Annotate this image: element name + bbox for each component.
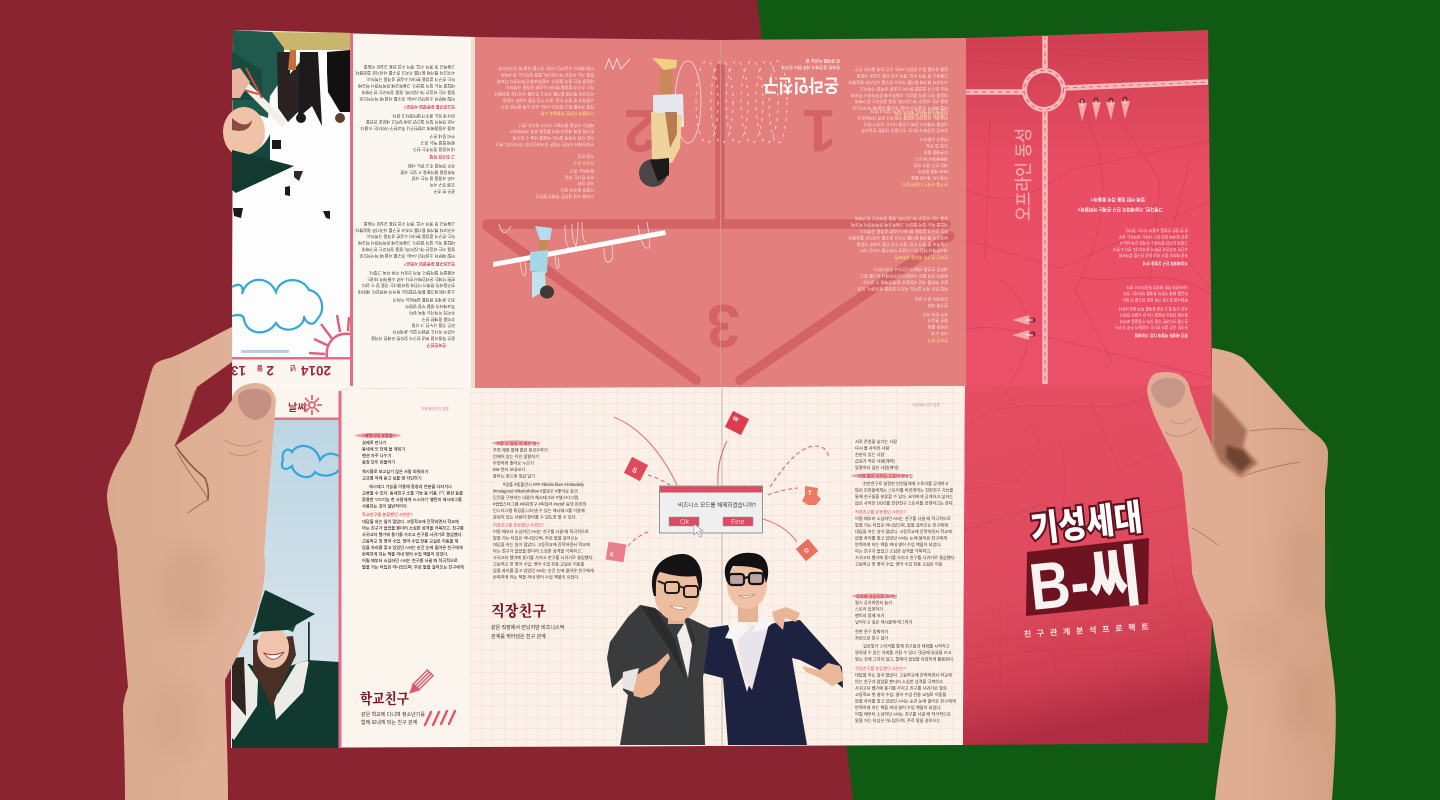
text column: upside-down upper: 서로 사정을 잘 아는 사람 xyxy=(412,175,455,182)
text column: upside-down upper: 요즘 사람들에게 고향친구나 학교친구 이야기는 드물다. xyxy=(359,125,455,132)
panel: front cover xyxy=(963,385,1212,745)
panel: top-right red map with roundabout xyxy=(966,30,1212,386)
text block: work friend lower right xyxy=(852,593,956,724)
text block: right column lower: 같은 관심사 xyxy=(927,317,948,324)
text block: right column lower: 직접 만난 적이 없어도 서로의 일상을 공유한다. 또한 xyxy=(858,285,948,292)
header: weather label and sun: 날씨 xyxy=(288,401,306,414)
text block: work friend left: 직장친구를 분류했던 사연은? xyxy=(493,522,545,528)
text block: work friend left: 앉을 자리를 찾고 있었던 A씨는 순간 눈에 들어온 친구에게 xyxy=(493,567,594,574)
heading subtitle: 된 관계를 이르는 말 xyxy=(806,58,840,65)
question heading xyxy=(1078,196,1163,213)
text block: work friend left: 관심이 있는 사람이 찾아올 수 있도록 할 수 있다. xyxy=(493,514,577,520)
dialog box: 비즈니스 모드를 해제하겠습니까? xyxy=(678,501,756,509)
text column: upside-down lower: 말을 거는 타입은 아니었으며, 말을 걸어오는 친구에게 xyxy=(362,246,455,253)
text block: work friend lower right: 일로맛가 스티커를 통해 친구들과 대화를 시작하고 xyxy=(863,642,950,650)
text block: left column: 디지털의 다양한 유형들과 소통 xyxy=(540,110,594,117)
text column: upside-down lower: 사람들이 많아졌다. 특히 코로나 이후 더욱 그렇다. xyxy=(369,269,455,276)
doodle: white ellipse and dashes xyxy=(605,59,787,143)
text block: right column lower: 장점이 있어 많은 사람들이 온라인에서 친구를 찾고 xyxy=(860,273,948,280)
text block: work friend lower right: 사귀고자 했기에 용기를 가지고 친구를 사귀기로 결심 xyxy=(855,684,947,692)
text block: offline paragraph 2: 온라인 공간 없이 만나는 사람들이 주로 친구가 xyxy=(1115,325,1188,330)
icon: blue cloud outline xyxy=(232,280,322,332)
text block: work friend left xyxy=(492,440,594,580)
text column: upside-down upper: 대답을 하는 일이 많았다. 고등학교에 진학하면서 학교에 xyxy=(358,82,455,89)
text block: work friend left: 인스타그램 특징을 나타낼 수 있는 해시태그를 이용해 xyxy=(493,507,585,514)
text block: offline paragraph 2: 1990년대 학번 세대의 특징이라고 한다 xyxy=(1126,285,1188,290)
text column: upside-down lower: 시간이 지나도 변함이 없는 관계이다 xyxy=(392,329,455,336)
icon: O file xyxy=(796,539,818,561)
panel: bottom-center grid spread xyxy=(470,386,965,747)
text block: work friend lower right: 앉을 자리를 찾고 있었던 A씨는 순간 눈에 들어온 친구에게 xyxy=(855,698,956,704)
text block: right column middle: 온라인 공간에서 만나는 친구들은 다양한 관심사로 xyxy=(861,127,948,134)
text block: offline paragraph 2: 모임을 통해 꾸준히 관계를 이어가는 것이 xyxy=(1123,291,1188,296)
text block: work friend left: 대답을 하는 일이 많았다. 고등학교에 진학하면서 학교에 xyxy=(493,541,590,548)
icon: Word file xyxy=(725,411,749,435)
text block: work friend left: 단전을 구현하는 내용의 해시태그와 '#셀스타그램, xyxy=(493,494,579,501)
text block: offline paragraph 2 xyxy=(1115,285,1188,338)
number 2: 2 xyxy=(624,97,657,164)
text block: work friend right: 말을 거는 타입은 아니었으며, 말을 걸어오는 친구에게 xyxy=(855,522,948,528)
subtitle: work friend: 관계를 뛰어넘은 친구 관계 xyxy=(491,633,546,640)
hand: right hand with thumb in front of brochure xyxy=(1147,348,1336,800)
text block: work friend right: 앉을 자리를 찾고 있었던 A씨는 눈에 들어온 친구에게 xyxy=(855,534,947,542)
bar with doodle loops xyxy=(499,222,650,276)
photo: upside-down graduates xyxy=(223,30,350,358)
decorative big lines xyxy=(487,68,950,380)
text column: upside-down lower: 사귀고자 했기에 용기를 가지고 친구를 사귀기로 결심했다. xyxy=(354,227,455,234)
road: cross with roundabout xyxy=(966,36,1208,384)
header: weather label and sun xyxy=(232,389,339,418)
text block: left column: 자주 만나는 모임 xyxy=(565,174,594,181)
text block: right column middle: 서로를 이해하고 함께 시간을 나누는 사이가 된다 xyxy=(864,121,948,128)
text block: right column lower: 자주 연락 하기 xyxy=(922,311,948,318)
text block: right column upper: 앉을 자리를 찾고 있었던 A씨는 순간 눈에 들어온 친구 xyxy=(855,66,948,73)
text block: work friend right xyxy=(851,438,956,568)
text block: left column: 디지털 시대 새로운 관계가 열린다 xyxy=(535,193,594,200)
icon: X file: X xyxy=(609,552,614,559)
text column: upside-down upper: 오랜 친구 사이 xyxy=(429,182,455,189)
text block: work friend right: 맞팔하지 않은 사람(계약) xyxy=(855,464,899,471)
text column: school friend: 책시를로 보고싶기 않은 사람 외워하기 xyxy=(362,468,428,475)
text block: right column lower: 온라인 친구의 특징을 살펴보면 xyxy=(894,254,948,261)
text column: upside-down upper: 아는 친구가 없었을 뿐더러 소심한 성격을 극복하고, xyxy=(366,76,455,83)
photo: graduate in sky xyxy=(232,419,339,748)
text block: right column lower: 모임에서 친구 만남 xyxy=(915,295,948,302)
text block: work friend lower right: 넣어두고 싶은 게시물에 태그하기 xyxy=(855,618,913,626)
title: B-ssi: B-씨 xyxy=(1026,539,1144,624)
date header: 2014 xyxy=(300,363,331,378)
text block: work friend right: 서로 존칭을 낮기는 사람 xyxy=(855,438,897,445)
text block: work friend right: 가장 많이 쓰이는 스토리 공유법 xyxy=(858,472,913,480)
curved connector lines xyxy=(614,417,829,546)
text column: school friend: 활용한 'OO기능 한 사람에게 스스하기' 챌린지 해시태그를 xyxy=(362,496,462,503)
icon: text file: T xyxy=(808,491,812,497)
text block: right column middle: 처음에는 낯설지만 대화를 이어가다 보면 가까워지고 xyxy=(857,114,948,121)
gap between fingers xyxy=(175,362,232,446)
question heading: 그렇다면, 기성세대의 친구 관계는 어떠할까? xyxy=(1078,206,1163,213)
text column: upside-down lower: 대답을 하는 일이 많았다. 고등학교에 진학하면서 학교에 xyxy=(358,240,455,247)
text block: offline paragraph 2: 서로 오래 알고 지낸 관계를 특히 중요시한다 xyxy=(1118,306,1188,311)
text block: left column: 어릴 때부터 소심하던 A씨는 친구를 사귈 때 적극적으로 xyxy=(498,65,594,72)
text column: school friend: 아는 친구가 없었을 뿐더러 소심한 성격을 극복하고, 친구를 xyxy=(362,524,464,532)
text column: upside-down lower: 같은 학창시절 보낸 친구가 있다면 오래된 기억들 xyxy=(371,335,455,342)
text block: work friend right: 급료가 적은 사람(계약) xyxy=(855,458,895,464)
text column: upside-down upper: 사귀고자 했기에 용기를 가지고 친구를 사귀기로 결심했다. xyxy=(354,70,455,77)
text block: right column middle xyxy=(857,108,948,188)
text column: school friend: 사용하는 것이 일반적이다. xyxy=(362,502,408,510)
heading: school friend: 학교친구 xyxy=(360,688,409,709)
text block: work friend left: 추천 계정 팔때 올린 원것우하기 xyxy=(493,446,548,454)
text column: school friend: 앉을 자리를 찾고 있었던 A씨는 순간 눈에 들어온 친구에게 xyxy=(362,544,463,551)
text block: right column lower: 고등학교 첫 영어 수업, 영어 수업 전용 교실로 이동을 xyxy=(856,241,948,248)
text block: work friend left: #instagood #likeforfollow #팔로우 #좋아요 등의 xyxy=(493,488,578,494)
panel: bottom-left sky photo and text column: 기성세대 친구 분류 xyxy=(421,406,449,411)
icon: Word file: W xyxy=(731,416,739,424)
text column: upside-down lower: 추억을 함께한 친구 xyxy=(422,316,455,323)
text block: right column upper: 디지털의 다양한 유형들과 소통 xyxy=(894,111,948,118)
number 1: 1 xyxy=(803,97,836,164)
text block: left column: 함께하는 친구 xyxy=(570,167,594,174)
text block: left column: 온라인에서 시작된 우정은 오프라인으로 이어지기도 한다 xyxy=(496,141,594,148)
text block: right column lower: 게시판에서 처음 만나 다양한 이야기를 나누던 사이 xyxy=(860,247,948,254)
text block: work friend left: 사귀고자 했기에 용기를 가지고 친구를 사귀기로 결심했다. xyxy=(493,554,594,561)
text block: work friend right: 어릴 때부터 소심하던 A씨는 친구를 사귈 때 적극적으로 xyxy=(855,515,951,522)
icon: slide file xyxy=(624,457,648,481)
text block: right column upper: 아는 친구가 없었을 뿐더러 소심한 성격을 극복하고, xyxy=(859,85,948,92)
text block: offline paragraph 2: 친구를 만나려면 직접 찾아가 얼굴을 보아야 xyxy=(1119,319,1188,324)
text block: work friend lower right: 대답을 하는 일이 많았다. 고등학교에 진학하면서 학교에 xyxy=(855,672,952,678)
title box xyxy=(1026,538,1149,616)
text block: work friend lower right: 어릴 때부터 소심하던 A씨는 친구를 사귈 때 적극적으로 xyxy=(855,710,951,718)
text block: right column middle: 게임 친구 맺기 사연 xyxy=(914,162,948,169)
text block: right column lower: 새로운 인연을 만들어 나간다고 이야기한다 xyxy=(874,266,948,273)
text block: work friend right: 직장친구를 분류했던 사연은? xyxy=(855,508,907,516)
text block: work friend right: 많은 인친들에게는 스토리를 비공개하는 친한친구 기능을 xyxy=(855,486,953,494)
icon: text file xyxy=(802,486,821,505)
text block: left column: 서로 다른 지역에 살아도 마음을 나눌 수 있으며, xyxy=(511,135,594,142)
heading subtitle xyxy=(781,58,840,71)
map roads xyxy=(966,55,1212,384)
subtitle: friend relationship analysis project: 친구관계분석프로젝트 xyxy=(1024,621,1150,639)
text block: work friend lower right: 아는 친구가 없었을 뿐더러 소심한 성격을 극복하고 xyxy=(855,678,943,685)
text column: upside-down lower: 친구들과의 관계가 이전과 달라졌다는 것을 알 수 있다. xyxy=(361,282,455,289)
text block: work friend right: 친분이 있는 사람 xyxy=(855,451,884,458)
text block: work friend lower right: 말을 거는 타입은 아니었으며, 주로 말을 걸어오는 xyxy=(855,717,940,724)
date header: 13 xyxy=(230,363,246,378)
date header xyxy=(230,363,331,378)
text block: work friend right: 아는 친구가 없었고 소심한 성격을 극복하고, xyxy=(855,548,931,554)
text block: work friend lower right: 자만으로 친구 끊기 xyxy=(855,634,888,642)
text block: right column lower: 온라인 친구 xyxy=(927,337,948,344)
photo: upside-down boy in checked shirt xyxy=(639,58,684,187)
text block: work friend left: #맞폴 #맞폴언시 ### #likeforlikes #instadaily xyxy=(503,481,585,488)
text column: school friend: 해시태그 기능을 이용해 동창과 친분을 다지거나 xyxy=(369,483,452,490)
text column: school friend: 동네에 또 언제 들 계획기 xyxy=(362,446,405,452)
text block: right column upper: 고등학교 첫 영어 수업, 영어 수업 전용 교실로 이동을 xyxy=(856,73,948,80)
text block: offline paragraph 1: 같은 동네에 살던 친구 사이는 깊어지는 경우 xyxy=(1118,234,1188,239)
text block: left column: 때로는 고민을 털어놓는 사이가 되기도 한다 xyxy=(519,122,594,129)
text block: work friend right: 대답을 하는 일이 많았다. 고등학교에 진학하면서 학교에 xyxy=(855,528,952,535)
text block: right column lower xyxy=(847,215,948,344)
subtitle: school friend: 같은 학교에 다니며 청소년기를 xyxy=(361,711,425,718)
icon: blue cloud xyxy=(282,446,339,477)
pink rules xyxy=(232,33,475,388)
text block: work friend lower right: 멘트의 함께 하기 xyxy=(855,612,884,619)
text block: work friend right: 사귀고자 했기에 용기를 가지고 친구를 사귀기로 결심했다. xyxy=(855,554,956,561)
text block: right column lower: 대답을 하는 일이 많았다. 고등학교에 진학하면서 학교에 xyxy=(851,222,948,229)
soft shading on hand xyxy=(1228,520,1318,740)
dialog box: Ok xyxy=(680,519,689,526)
icon: pencil xyxy=(408,670,433,695)
text block: offline paragraph 2: 학창시절 친구와 가족 같은 친구를 더 찾는 xyxy=(1122,297,1188,302)
text block: right column middle: 커뮤니티 게시판 활동 xyxy=(911,175,948,182)
decoration: pink slashes xyxy=(425,711,455,725)
text block: work friend left: DM 먼저 보내보기 xyxy=(493,466,525,473)
text block: offline paragraph 1: 그렇게 친구와 멀어져도 추억은 오래 남는다 xyxy=(1119,241,1188,246)
text block: right column lower: 서로 소개 xyxy=(931,330,948,337)
pink rules xyxy=(272,391,342,748)
text column: upside-down lower: 모든 것을 나누던 그 시절 xyxy=(412,322,455,329)
text block: right column lower: 친구와 대화 xyxy=(927,302,948,309)
text column: upside-down upper: 만나게 되는 경우가 많아졌다고 한다. xyxy=(391,112,455,119)
text block: work friend left: 무증하게 좋아요 누르기 xyxy=(493,460,534,466)
text column: upside-down lower: 온라인친구 xyxy=(427,342,446,349)
text block: left column: 직접 만남 xyxy=(577,153,594,160)
text block: work friend lower right: 릴스 공유하면서 놀기 xyxy=(855,599,892,606)
text block: left column: 서로 연락 xyxy=(577,180,594,187)
text block: offline paragraph 2: 청년 세대와 어떻게 다른 기성세대 xyxy=(1134,333,1188,338)
text block: offline paragraph 1: 한 번 맺은 인연을 소중히 여기는 것이다 xyxy=(1125,228,1188,233)
text column: upside-down upper: 고등학교 첫 영어 수업, 영어 수업 전용 교실로 이동을 xyxy=(363,63,455,70)
text column: upside-down upper xyxy=(354,63,455,195)
text block: work friend left: 어릴 때부터 소심하던 A씨는 친구를 사귈 때 적극적으로 xyxy=(493,528,589,535)
heading subtitle: 온라인 공간에서 서로 만나 친구가 xyxy=(781,64,840,71)
text block: work friend lower right: 맞는 것에 그치지 않고, 릴레이 끊임을 다양하게 활용된다. xyxy=(855,656,954,662)
text block: right column middle: 친구를 사귀는 다양한 방식 xyxy=(902,181,948,188)
text block: offline paragraph 1 xyxy=(1112,228,1188,266)
text block: right column upper: 대답을 하는 일이 많았다. 고등학교에 진학하면서 학교에 xyxy=(851,92,948,99)
text column: school friend: 사귀고자 했기에 용기를 가지고 친구를 사귀기로 결심했다. xyxy=(362,531,463,538)
text column: upside-down upper: 자주 연락을 주고 받는 사람 xyxy=(408,162,455,169)
text block: work friend lower right: 고등학교 첫 영어 수업, 영어 수업 전용 교실로 이동을 xyxy=(855,691,947,698)
panel: bottom-center grid spread: 기성세대 친구 분류 xyxy=(912,402,940,407)
text column: upside-down upper: 내 마음을 알아주는 친구 xyxy=(413,146,455,153)
dialog box: Fine xyxy=(731,519,745,526)
text block: left column: 아는 친구가 없었을 뿐더러 소심한 성격을 극복하고, xyxy=(505,84,594,91)
date header: 년 xyxy=(290,364,296,373)
text block: right column lower: 사귀고자 했기에 용기를 가지고 친구를 사귀기로 결심했다. xyxy=(847,234,948,241)
vertical heading: offline same-sex: 오프라인 동성 xyxy=(1014,128,1034,221)
text column: upside-down upper: 어릴 때부터 소심하던 A씨는 친구를 사귈 때 적극적으로 xyxy=(359,95,455,102)
soft shading on hand xyxy=(145,545,220,760)
text block: right column upper xyxy=(847,66,948,118)
text block: work friend left: #럽럽스타그램 #여자친구 #피일러 #ootd' 등의 본인의 xyxy=(493,500,587,508)
dialog box xyxy=(660,486,762,537)
text block: work friend left: 가장 그 일의 이 회는 법은 xyxy=(496,440,540,447)
photo: upside-down boy on white bar xyxy=(493,226,666,298)
text block: work friend right: 통해 친구들을 분류할 수 있다. 요약하게 공개하고 싶지는 xyxy=(855,493,953,500)
text column: upside-down lower: 고등학교 첫 영어 수업, 영어 수업 전용 교실로 이동을 xyxy=(363,220,455,227)
text column: upside-down upper: 함께 밥을 먹는 친구 xyxy=(421,140,455,146)
text column: upside-down upper: 말을 거는 타입은 아니었으며, 말을 걸어오는 친구에게 xyxy=(362,89,455,96)
text column: upside-down lower: 아는 친구가 없었을 뿐더러 소심한 성격을 극복하고, xyxy=(366,233,455,240)
text column: school friend: 말을 거는 타입은 아니었으며, 주로 말을 걸어오는 친구에게 xyxy=(362,564,464,570)
text column: school friend: 고등학교 첫 영어 수업, 영어 수업 전용 교실로 이동을 해 xyxy=(362,538,459,544)
text block: offline paragraph 1: 어릴 때부터 알고 지낸 동성 친구를 찾아보면 xyxy=(1118,253,1188,258)
text block: work friend lower right: 친한 친구 멈춰하기 xyxy=(855,628,888,635)
text column: school friend: 동창 모두 만들어기 xyxy=(362,458,395,466)
text block: work friend right: 고등학교 첫 영어 수업, 영어 수업 전용 교실로 이동 xyxy=(855,560,943,568)
text block: left column: 고등학교 첫 영어 수업, 영어 수업 전용 교실로 이동을 xyxy=(502,97,594,104)
text block: right column upper: 사귀고자 했기에 용기를 가지고 친구를 사귀기로 결심했다. xyxy=(847,79,948,86)
text column: school friend xyxy=(355,432,464,570)
text column: school friend: 대답을 하는 일이 많았다. 고등학교에 진학하면서 학교에 xyxy=(362,518,459,525)
heading: work friend: 직장친구 xyxy=(491,600,546,621)
hand: left hand with thumb in front of brochure xyxy=(107,327,276,800)
text column: upside-down lower xyxy=(354,220,455,349)
icon: O file: O xyxy=(803,547,811,555)
text column: upside-down upper: 학교친구를 분류했던 사연은? xyxy=(403,103,455,110)
date header: 2 xyxy=(266,363,274,378)
text column: upside-down lower: 학교친구를 분류했던 사연은? xyxy=(403,260,455,267)
panel: top-left photo and upside-down column xyxy=(223,30,475,390)
knuckle creases xyxy=(1165,418,1305,545)
photo: two men in suits with thumbs up xyxy=(607,553,844,745)
panel: bottom-left sky photo and text column xyxy=(231,388,472,748)
text column: upside-down lower: 학교에서의 생활 우정 영원히 xyxy=(405,303,455,310)
dark gap behind thumb xyxy=(1212,392,1258,477)
text block: work friend lower right: 직장친구를 분류했던 사연은? xyxy=(855,665,907,672)
text block: offline paragraph 2: 편지와 전화로 마음을 나누던 시절이 있었다 xyxy=(1119,313,1188,318)
text block: work friend left: 아는 친구가 없었을 뿐더러 소심한 성격을 극복하고, xyxy=(493,548,582,554)
text block: left column: 친구와 함께 게임과 취미 활동을 하며 가까워지고 xyxy=(510,128,594,135)
text column: school friend: 실제로 만나기 xyxy=(362,439,386,446)
text block: left column: 온라인 친구 xyxy=(573,159,594,166)
text column: school friend: 어릴 때부터 소심하던 A씨는 친구를 사귈 때 적극적으로 xyxy=(362,557,458,564)
text column: upside-down lower: 어릴 때부터 소심하던 A씨는 친구를 사귈 때 적극적으로 xyxy=(359,252,455,259)
text column: upside-down upper: 서로 연락이 닿지 않으면 금세 잊히고 새로운 인연을 xyxy=(366,119,455,126)
thumbnail xyxy=(1151,378,1185,408)
date header: 월 xyxy=(257,364,263,373)
question heading: 함께 어떤 일을 겪어 왔을까? xyxy=(1090,196,1145,203)
heading: online friend: 온라인친구 xyxy=(763,75,839,95)
text block: work friend lower right: 알아낼 수 있는 기회를 가질 수 있다. 댓글에 달글을 쓰고 xyxy=(855,649,952,656)
text block: left column xyxy=(493,65,594,200)
panel: top-center salmon spread xyxy=(475,37,966,388)
text block: work friend right: 친한친구로 설정한 인친들에게 스토리를 공개하고 xyxy=(863,480,949,487)
text block: right column lower: 말을 거는 타입은 아니었으며, 말을 걸어오는 친구에게 xyxy=(855,215,948,222)
text column: school friend: 학교친구를 분류했던 사연은? xyxy=(362,511,414,518)
text block: right column middle: 댓글로 소통하기 xyxy=(920,136,948,143)
text block: work friend right: 않은 사적인 OOO를 친한친구 스토리를 공개하고는 한다. xyxy=(855,500,954,506)
text block: offline paragraph 1: 기성세대의 친구 유형을 분석 xyxy=(1142,261,1188,266)
text column: upside-down lower: 우리의 이야기는 계속 된다 xyxy=(409,309,455,316)
text block: right column middle: 직접 만나지 않아도 친구가 될 수 있다고 한다 xyxy=(870,108,948,115)
subtitle: school friend: 함께 보내게 되는 친구 관계 xyxy=(361,719,418,726)
icon: slide file: S xyxy=(631,467,638,475)
text block: right column lower: 같은 취미를 가진 사람들과 쉽게 친해질 수 있다는 xyxy=(863,279,948,286)
text block: work friend left: 언제어 있는 이인 맞팔하기 xyxy=(493,453,539,460)
text block: left column: 앉을 자리를 찾고 있었던 A씨는 순간 눈에 들어온 친구 xyxy=(501,103,594,110)
text block: right column lower: 온라인 활동 xyxy=(927,324,948,331)
text column: upside-down lower: 한편 이제는 온라인에서 만나 서로 소통하며 지내는 xyxy=(367,276,455,283)
text block: work friend lower right: 반쪽하게 하는 책을 꺼내 영어 수업 책을이 되었다. xyxy=(855,704,941,711)
text block: work friend left: 말을 거는 타입은 아니었으며, 주로 말을 걸어오는 xyxy=(493,534,578,542)
text block: right column middle: 오픈채팅 참여 xyxy=(924,149,948,156)
text block: work friend left: 좋아는 최드에 댓글 달기 xyxy=(493,472,535,480)
text column: upside-down upper: 속마음을 털어놓을 수 있는 사람 xyxy=(400,169,455,176)
thumbnail xyxy=(238,389,271,420)
text block: work friend left: 고등학교 첫 영어 수업, 영어 수업 전용 교실로 이동을 xyxy=(493,560,585,568)
text column: upside-down lower: 친구 관계의 변화를 살펴보는 이야기 xyxy=(392,297,455,304)
text block: left column: 사귀고자 했기에 용기를 가지고 친구를 사귀기로 결심했다. xyxy=(493,91,594,98)
text block: work friend lower right: 동호회 가능으로 쓰기법 xyxy=(856,593,897,600)
text block: offline paragraph 1: 시간이 흐르면서 연락이 끊어지기도 한다고 한다 xyxy=(1112,247,1188,252)
text column: school friend: 교과를 아래 듣고 싶을 땐 자단하기 xyxy=(362,474,422,482)
icon: two map pins pointing left xyxy=(1012,315,1036,340)
text block: work friend right: 다시 볼 사이인 사람 xyxy=(855,444,889,452)
text block: left column: 말을 거는 타입은 아니었으며, 말을 걸어오는 친구에게 xyxy=(501,71,594,78)
text block: right column lower: 아는 친구가 없었을 뿐더러 소심한 성격을 극복하고, xyxy=(859,228,948,235)
subtitle: work friend: 같은 직장에서 만났지만 비즈니스적 xyxy=(491,624,564,631)
title: generation: 기성세대 xyxy=(1028,497,1144,550)
text column: school friend: 펜션 자주 나누기 xyxy=(362,452,391,459)
text block: right column middle: SNS 계정 팔로우 xyxy=(918,168,948,175)
text block: right column middle: 채팅방에서 만나기 xyxy=(916,155,948,162)
text block: left column: 대답을 하는 일이 많았다. 고등학교에 진학하면서 학교에 xyxy=(497,78,594,85)
man on left xyxy=(607,554,710,745)
text block: right column upper: 말을 거는 타입은 아니었으며, 말을 걸어오는 친구에게 xyxy=(855,98,948,105)
icon: four map pins pointing down xyxy=(1078,96,1130,121)
text block: work friend left: 반쪽하게 하는 책을 꺼내 영어 수업 책을이 되었다. xyxy=(493,574,579,580)
text column: upside-down upper: 우리 동네 친구 xyxy=(429,133,455,140)
text column: upside-down upper: 같은 반 친구 xyxy=(433,188,455,195)
man on right xyxy=(703,553,844,745)
number 3: 3 xyxy=(707,292,740,359)
text column: school friend: 반쪽하게 하는 책을 꺼내 영어 수업 책을이 되었다. xyxy=(362,550,448,558)
text column: upside-down upper: 그 친구의 유형 xyxy=(429,153,455,160)
icon: sun xyxy=(309,315,350,358)
text column: upside-down lower: 소셜 네트워크를 통해 연결되는 방식이 바뀌었다. 예컨대 xyxy=(358,289,455,296)
text column: school friend: <재택시대 교류법> xyxy=(362,432,396,439)
icon: X file xyxy=(606,542,626,562)
text block: work friend lower right: 스토리 답장하기 xyxy=(855,606,883,612)
map roads on cover xyxy=(964,385,1212,740)
finger creases xyxy=(175,390,262,513)
text column: school friend: 교류할 수 있다. 동네친구 소통 기능 등 이용, PT, 펜션 등을 xyxy=(362,490,463,496)
text block: right column middle: 모임 앱 가입 xyxy=(926,143,948,150)
text block: left column: 다양한 방식이 있다 xyxy=(561,187,594,194)
text block: work friend right: 반쪽하게 하는 책을 꺼내 영어 수업 책을이 되었다. xyxy=(855,541,941,548)
text block: right column upper: 어릴 때부터 소심하던 A씨는 친구를 사귈 때 적극적으로 xyxy=(852,105,948,112)
